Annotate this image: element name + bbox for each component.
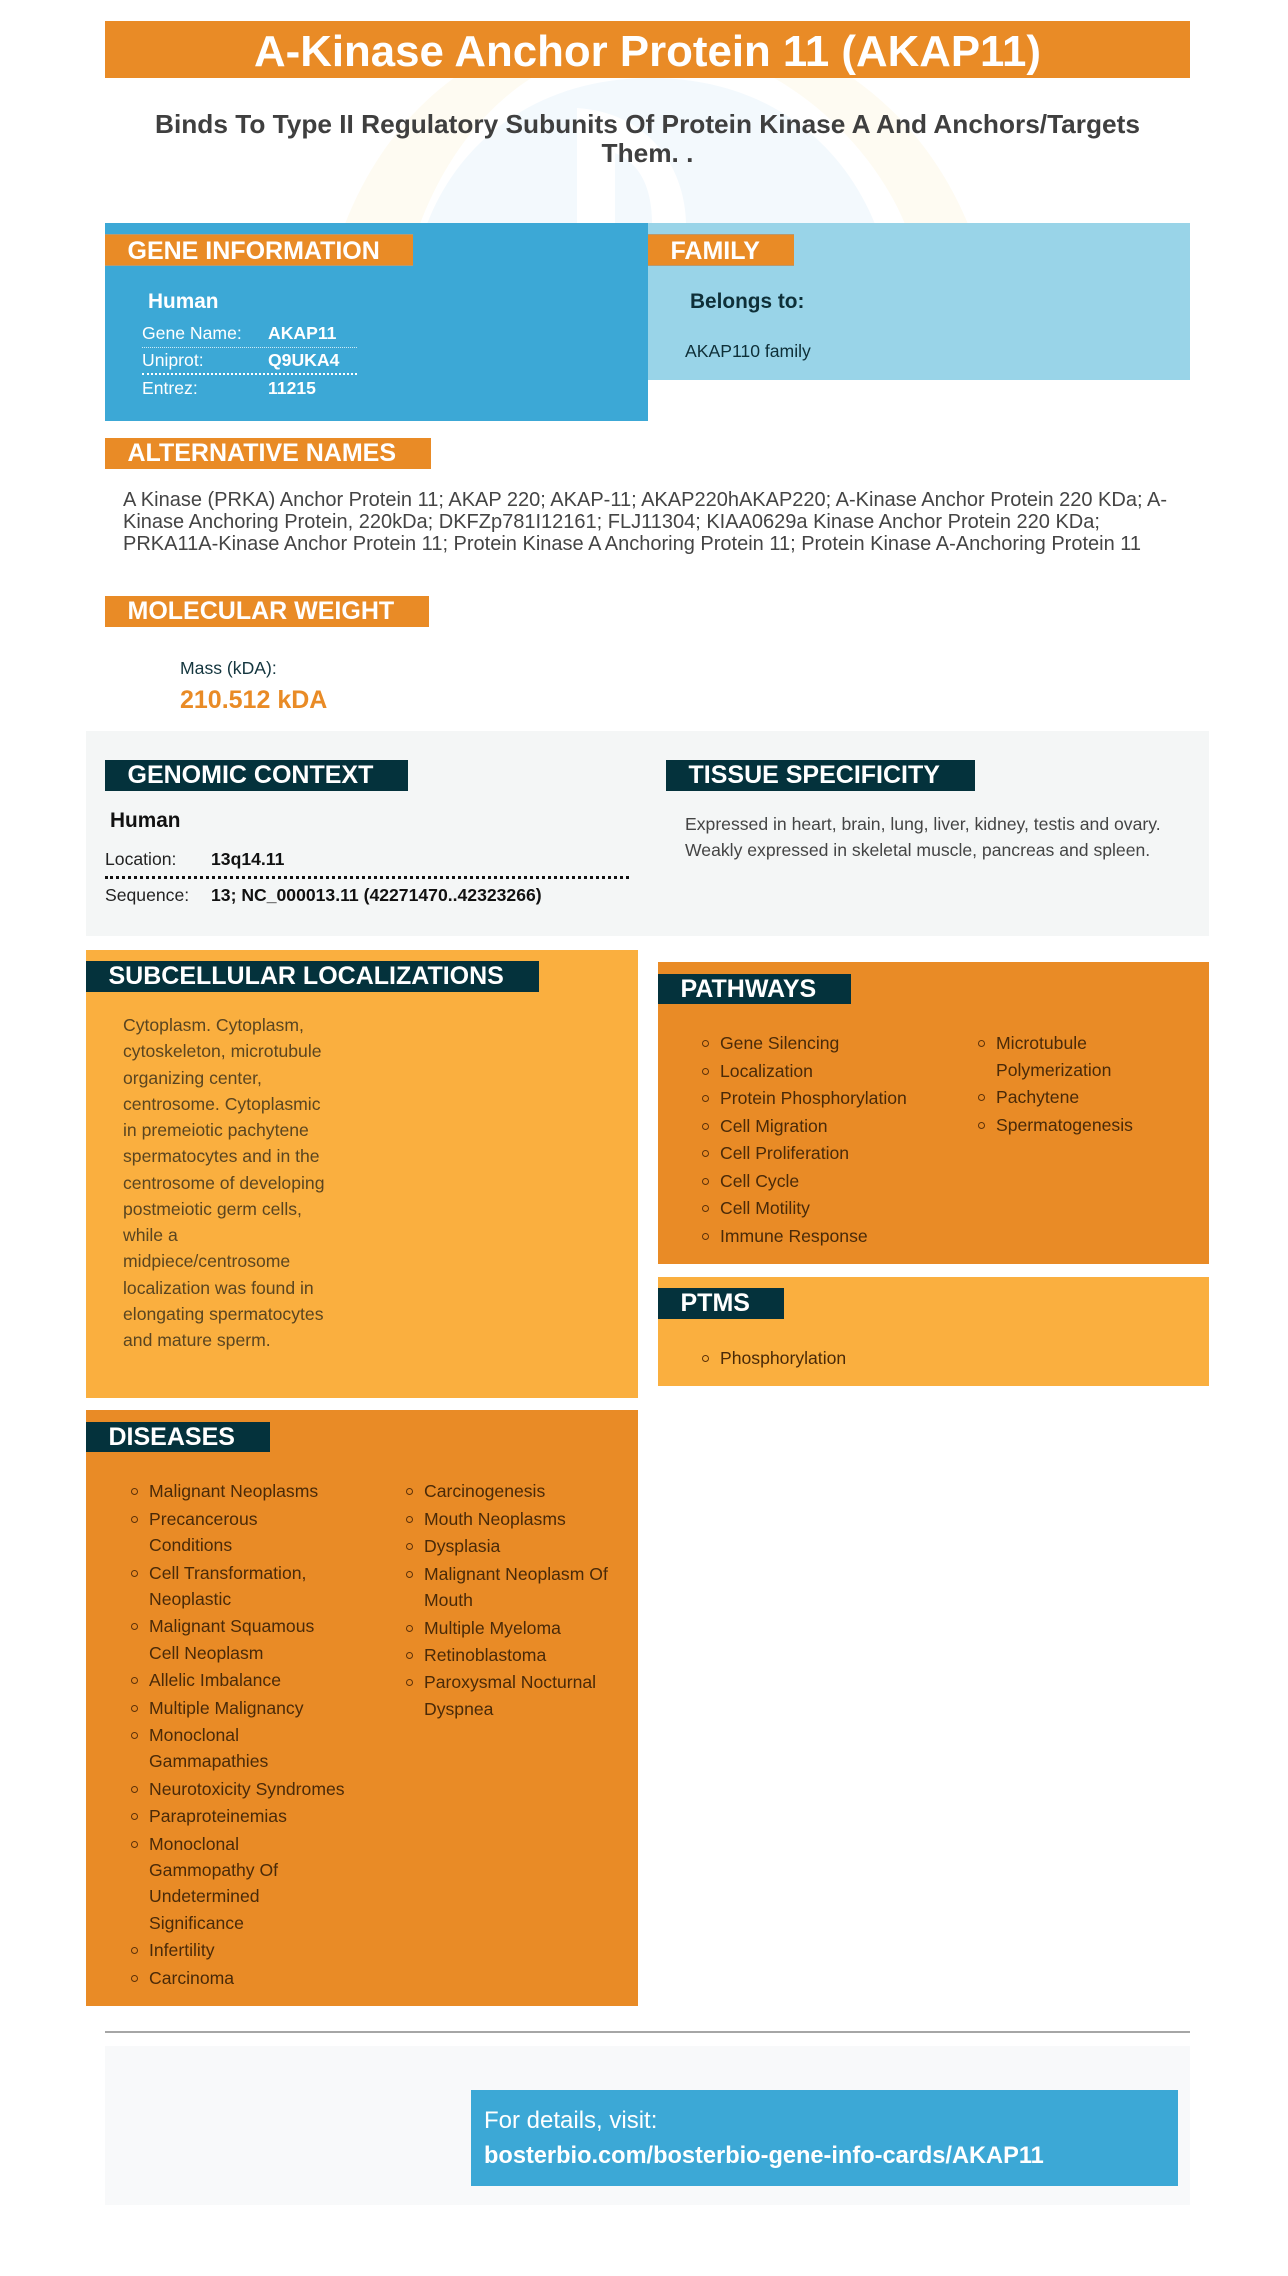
- entrez row: Entrez:: [142, 378, 198, 398]
- belongs to label: Belongs to:: [690, 290, 804, 313]
- gene name row: Gene Name:: [142, 323, 242, 343]
- location row: [105, 849, 629, 879]
- family value: AKAP110 family: [685, 341, 811, 361]
- pathways list column 2: Spermatogenesis: [996, 1115, 1133, 1135]
- pathways list column 1: Cell Proliferation: [720, 1143, 849, 1163]
- diseases list column 1: Gammapathies: [149, 1751, 268, 1771]
- diseases list column 1: Monoclonal: [149, 1834, 239, 1854]
- diseases list column 1: Significance: [149, 1913, 244, 1933]
- diseases list column 1: Neoplastic: [149, 1589, 231, 1609]
- pathways list column 1: Localization: [720, 1061, 813, 1081]
- pathways list column 1: Gene Silencing: [720, 1033, 839, 1053]
- diseases list column 1: Cell Neoplasm: [149, 1643, 263, 1663]
- panel: ptms: [658, 1277, 1209, 1386]
- mass value: 210.512 kDA: [180, 686, 327, 714]
- localization text: midpiece/centrosome: [123, 1251, 290, 1271]
- diseases list column 1: Conditions: [149, 1535, 232, 1555]
- heading: pathways: [658, 974, 851, 1004]
- sequence row: Sequence:: [105, 885, 189, 905]
- pathways list column 2: [978, 1033, 1133, 1135]
- diseases list column 1: Neurotoxicity Syndromes: [149, 1779, 345, 1799]
- localization text: centrosome of developing: [123, 1172, 324, 1192]
- diseases list column 1: Paraproteinemias: [149, 1806, 287, 1826]
- pathways list column 1: Cell Cycle: [720, 1171, 799, 1191]
- pathways list column 1: [702, 1033, 907, 1246]
- heading: ptms: PTMS: [680, 1289, 750, 1317]
- tissue specificity text: Weakly expressed in skeletal muscle, pancreas and spleen.: [685, 840, 1150, 860]
- panel: genomic context and tissue specificity: [86, 731, 1209, 936]
- tissue specificity text: Expressed in heart, brain, lung, liver, kidney, testis and ovary.: [685, 814, 1161, 834]
- localization text: while a: [123, 1225, 178, 1245]
- pathways list column 2: Pachytene: [996, 1087, 1079, 1107]
- localization text: [123, 1015, 324, 1350]
- diseases list column 1: Gammopathy Of: [149, 1860, 278, 1880]
- heading: diseases: [86, 1422, 270, 1452]
- callout intro: For details, visit:: [484, 2107, 657, 2134]
- diseases list column 1: Undetermined: [149, 1886, 260, 1906]
- diseases list column 2: Mouth Neoplasms: [424, 1509, 566, 1529]
- heading: pathways: PATHWAYS: [680, 975, 816, 1003]
- pathways list column 2: Polymerization: [996, 1060, 1111, 1080]
- footer divider: [105, 2031, 1190, 2033]
- mass label: Mass (kDA):: [180, 658, 277, 678]
- localization text: localization was found in: [123, 1278, 314, 1298]
- heading: alternative names: ALTERNATIVE NAMES: [128, 439, 396, 467]
- diseases list column 1: [131, 1481, 345, 1988]
- panel: subcellular localizations: [86, 950, 638, 1398]
- localization text: postmeiotic germ cells,: [123, 1199, 302, 1219]
- heading: subcellular localizations: SUBCELLULAR LOCALIZATIONS: [108, 962, 504, 990]
- tissue specificity text: [685, 814, 1161, 860]
- localization text: Cytoplasm. Cytoplasm,: [123, 1015, 304, 1035]
- diseases list column 2: Retinoblastoma: [424, 1645, 546, 1665]
- subtitle: Binds To Type II Regulatory Subunits Of Protein Kinase A And Anchors/Targets: [155, 109, 1140, 139]
- diseases list column 2: Malignant Neoplasm Of: [424, 1564, 608, 1584]
- species label: Human: [110, 809, 180, 832]
- subtitle: Them. .: [602, 138, 693, 168]
- diseases list column 1: Monoclonal: [149, 1725, 239, 1745]
- localization text: and mature sperm.: [123, 1330, 271, 1350]
- heading: diseases: DISEASES: [108, 1423, 235, 1451]
- diseases list column 1: Multiple Malignancy: [149, 1698, 304, 1718]
- diseases list column 2: [406, 1481, 608, 1719]
- localization text: centrosome. Cytoplasmic: [123, 1094, 321, 1114]
- panel: pathways: [658, 962, 1209, 1264]
- subtitle: [155, 109, 1140, 168]
- sequence row: 13; NC_000013.11 (42271470..42323266): [211, 885, 542, 905]
- diseases list column 2: Dyspnea: [424, 1699, 493, 1719]
- gene name row: AKAP11: [268, 323, 336, 343]
- uniprot row: [142, 350, 357, 375]
- pathways list column 1: Cell Motility: [720, 1198, 810, 1218]
- localization text: cytoskeleton, microtubule: [123, 1041, 322, 1061]
- alternative names text: PRKA11A-Kinase Anchor Protein 11; Protein Kinase A Anchoring Protein 11; Protein Kinase A-Anchoring Protein 11: [123, 533, 1141, 555]
- heading: genomic context: GENOMIC CONTEXT: [128, 761, 373, 789]
- panel: footer: [105, 2046, 1190, 2205]
- diseases list column 1: Malignant Neoplasms: [149, 1481, 318, 1501]
- location row: Location:: [105, 849, 176, 869]
- diseases list column 1: Carcinoma: [149, 1968, 234, 1988]
- localization text: organizing center,: [123, 1068, 262, 1088]
- localization text: in premeiotic pachytene: [123, 1120, 309, 1140]
- alternative names text: A Kinase (PRKA) Anchor Protein 11; AKAP 220; AKAP-11; AKAP220hAKAP220; A-Kinase Anchor Protein 220 KDa; A-: [123, 489, 1167, 511]
- diseases list column 1: Malignant Squamous: [149, 1616, 314, 1636]
- pathways list column 1: Cell Migration: [720, 1116, 828, 1136]
- heading: family: [648, 234, 794, 266]
- heading: gene information: GENE INFORMATION: [128, 237, 380, 265]
- title: [105, 21, 1190, 78]
- title: A-Kinase Anchor Protein 11 (AKAP11): [254, 27, 1041, 76]
- localization text: elongating spermatocytes: [123, 1304, 324, 1324]
- panel: diseases: [86, 1410, 638, 2006]
- panel: family: [648, 223, 1190, 380]
- diseases list column 1: Allelic Imbalance: [149, 1670, 281, 1690]
- uniprot row: Uniprot:: [142, 350, 204, 370]
- callout url: bosterbio.com/bosterbio-gene-info-cards/AKAP11: [484, 2143, 1044, 2169]
- pathways list column 2: Microtubule: [996, 1033, 1087, 1053]
- pathways list column 1: Protein Phosphorylation: [720, 1088, 907, 1108]
- diseases list column 2: Multiple Myeloma: [424, 1618, 561, 1638]
- pathways list column 1: Immune Response: [720, 1226, 868, 1246]
- diseases list column 1: Cell Transformation,: [149, 1563, 306, 1583]
- diseases list column 2: Paroxysmal Nocturnal: [424, 1672, 596, 1692]
- watermark logo: [346, 78, 968, 223]
- location row: 13q14.11: [211, 849, 284, 869]
- alternative names text: [123, 489, 1167, 555]
- heading: molecular weight: MOLECULAR WEIGHT: [128, 597, 394, 625]
- entrez row: [142, 378, 316, 398]
- diseases list column 2: Dysplasia: [424, 1536, 500, 1556]
- entrez row: 11215: [268, 378, 316, 398]
- species label: Human: [148, 290, 218, 313]
- alternative names text: Kinase Anchoring Protein, 220kDa; DKFZp781I12161; FLJ11304; KIAA0629a Kinase Anchor Protein 220 KDa;: [123, 511, 1100, 533]
- diseases list column 2: Carcinogenesis: [424, 1481, 545, 1501]
- heading: ptms: [658, 1288, 784, 1319]
- diseases list column 2: Mouth: [424, 1590, 473, 1610]
- localization text: spermatocytes and in the: [123, 1146, 320, 1166]
- ptms list: Phosphorylation: [720, 1348, 846, 1368]
- heading: tissue specificity: TISSUE SPECIFICITY: [688, 761, 940, 789]
- panel: gene information: [105, 223, 648, 421]
- heading: family: FAMILY: [670, 237, 760, 265]
- diseases list column 1: Infertility: [149, 1940, 215, 1960]
- uniprot row: Q9UKA4: [268, 350, 339, 370]
- gene name row: [142, 323, 357, 348]
- diseases list column 1: Precancerous: [149, 1509, 258, 1529]
- callout: details link: [471, 2090, 1178, 2186]
